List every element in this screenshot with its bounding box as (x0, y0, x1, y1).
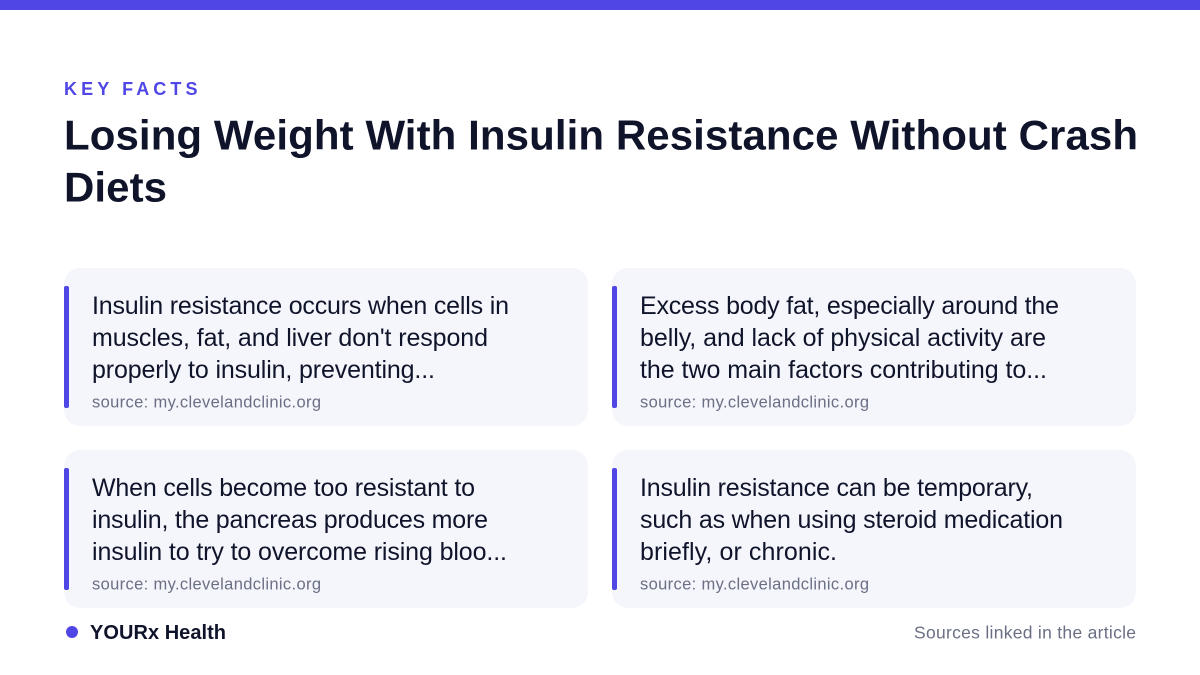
title: Diets (64, 164, 167, 210)
panel: fact 3 (64, 450, 588, 608)
text: fact 4: Insulin resistance can be temporary, (640, 474, 1033, 502)
accent bar: fact 2 (612, 286, 617, 408)
panel: fact 2 (612, 268, 1136, 426)
text: fact 4: such as when using steroid medication (640, 506, 1063, 534)
title: Losing Weight With Insulin Resistance Without Crash (64, 112, 1138, 158)
footer note: Sources linked in the article (914, 622, 1136, 642)
icon: brand dot (66, 626, 78, 638)
text: fact 3: insulin to try to overcome rising bloo... (92, 538, 507, 566)
brand name: YOURx Health (90, 622, 226, 644)
text: fact 3 (92, 474, 507, 566)
text: fact 3: When cells become too resistant to (92, 474, 475, 502)
text: fact 4 (640, 474, 1063, 566)
text: fact 2: belly, and lack of physical activity are (640, 324, 1046, 352)
source: fact 4: source: my.clevelandclinic.org (640, 576, 869, 594)
text: fact 1: muscles, fat, and liver don't respond (92, 324, 488, 352)
accent bar: fact 3 (64, 468, 69, 590)
top accent bar (0, 0, 1200, 10)
text: fact 1 (92, 292, 509, 384)
panel: fact 1 (64, 268, 588, 426)
text: fact 3: insulin, the pancreas produces more (92, 506, 488, 534)
source: fact 1: source: my.clevelandclinic.org (92, 394, 321, 412)
accent bar: fact 4 (612, 468, 617, 590)
text: fact 2: the two main factors contributing to... (640, 356, 1047, 384)
panel: fact 4 (612, 450, 1136, 608)
accent bar: fact 1 (64, 286, 69, 408)
eyebrow: key facts: KEY FACTS (64, 79, 198, 99)
title (64, 112, 1138, 210)
text: fact 2 (640, 292, 1059, 384)
source: fact 3: source: my.clevelandclinic.org (92, 576, 321, 594)
text: fact 2: Excess body fat, especially around the (640, 292, 1059, 320)
text: fact 4: briefly, or chronic. (640, 538, 837, 566)
brand footer (66, 622, 226, 644)
source: fact 2: source: my.clevelandclinic.org (640, 394, 869, 412)
text: fact 1: Insulin resistance occurs when cells in (92, 292, 509, 320)
text: fact 1: properly to insulin, preventing... (92, 356, 435, 384)
